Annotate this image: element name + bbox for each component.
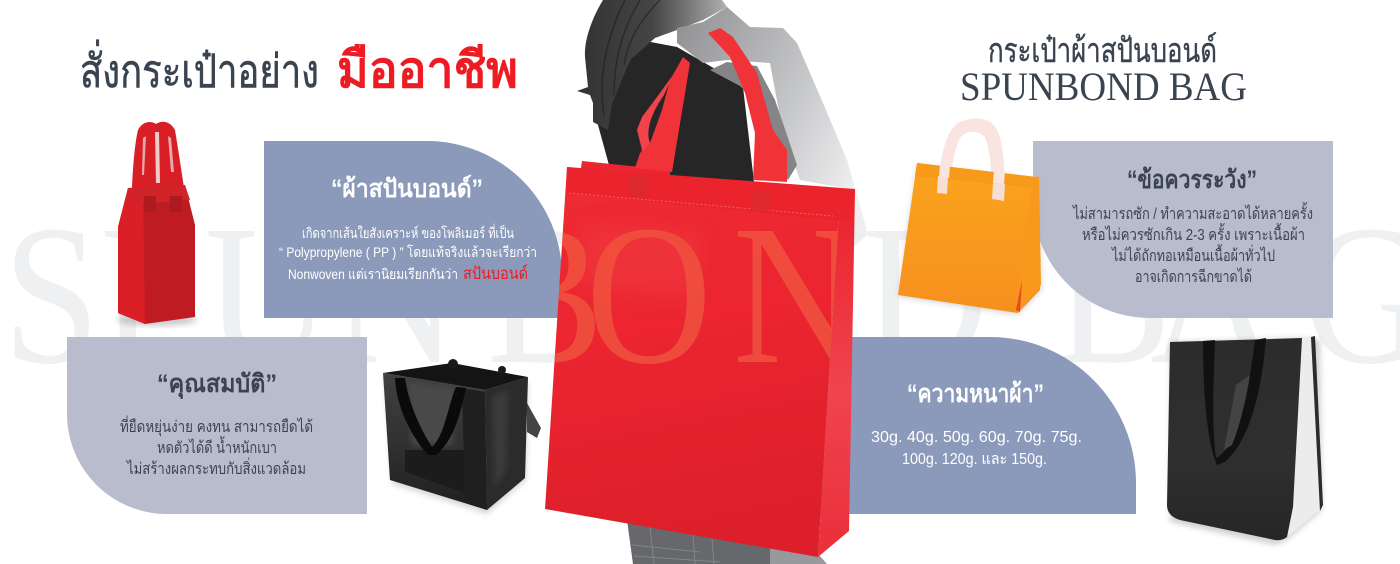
highlight xyxy=(580,225,700,300)
panel: fabric definition xyxy=(264,141,562,318)
heading: fabric: “ผ้าสปันบอนด์” xyxy=(331,174,483,203)
watermark over bag: SPUNBONDBAG xyxy=(3,184,1400,406)
icon: black box bag xyxy=(383,359,541,514)
title: right: SPUNBOND BAG xyxy=(960,64,1247,109)
gusset panel xyxy=(818,189,855,557)
text: properties description: ไม่สร้างผลกระทบกับสิ่งแวดล้อม xyxy=(125,457,306,478)
photo: woman holding bag xyxy=(577,0,868,564)
top hem xyxy=(566,167,855,222)
shirt xyxy=(710,62,797,180)
handle tabs xyxy=(630,176,648,198)
hair strands xyxy=(602,0,660,115)
text: cautions description: อาจเกิดการฉีกขาดได้ xyxy=(1135,267,1252,286)
title: right: กระเป๋าผ้าสปันบอนด์ xyxy=(988,32,1217,70)
text: properties description xyxy=(120,415,313,478)
arm and hand xyxy=(677,7,868,248)
text: cautions description: หรือไม่ควรซักเกิน 2-3 ครั้ง เพราะเนื้อผ้า xyxy=(1082,223,1305,244)
text: properties description: ที่ยืดหยุ่นง่าย คงทน สามารถยืดได้ xyxy=(120,415,313,437)
panel: properties xyxy=(67,337,367,514)
title: left: มืออาชีพ xyxy=(337,42,518,98)
text: cautions description: ไม่สามารถซัก / ทำความสะอาดได้หลายครั้ง xyxy=(1071,202,1313,223)
hair xyxy=(577,0,727,130)
heading: properties: “คุณสมบัติ” xyxy=(157,370,277,400)
black top xyxy=(598,40,754,182)
icon: black and white tote xyxy=(1167,336,1323,545)
text: fabric description: เกิดจากเส้นใยสังเคราะห์ ของโพลิเมอร์ ที่เป็น xyxy=(302,224,514,241)
title: left: สั่งกระเป๋าอย่าง xyxy=(80,39,319,97)
trousers right xyxy=(770,545,827,564)
stitching xyxy=(569,193,833,216)
heading: thickness: “ความหนาผ้า” xyxy=(907,380,1044,408)
text: thickness values xyxy=(871,429,1082,468)
front panel xyxy=(545,167,840,557)
text: fabric description: สปันบอนด์ xyxy=(463,264,528,283)
panel: fabric thickness xyxy=(820,337,1136,514)
back strap xyxy=(636,75,673,166)
heading: cautions: “ข้อควรระวัง” xyxy=(1127,166,1257,194)
text: fabric description xyxy=(279,224,537,283)
watermark: SPUNBOND BAG: SPUNBONDBAG xyxy=(3,184,1400,406)
text: thickness values: 100g. 120g. และ 150g. xyxy=(902,451,1047,468)
title: left xyxy=(80,39,518,98)
text: properties description: หดตัวได้ดี น้ำหนักเบา xyxy=(157,436,277,457)
text: fabric description: Nonwoven แต่เรานิยมเรียกกันว่า xyxy=(288,266,458,282)
plaid xyxy=(632,526,720,564)
panel: cautions xyxy=(1033,141,1333,318)
back flap xyxy=(580,161,670,180)
icon: small red bag xyxy=(117,122,197,326)
text: cautions description xyxy=(1071,202,1313,286)
text: thickness values: 30g. 40g. 50g. 60g. 70g. 75g. xyxy=(871,429,1082,446)
text: cautions description: ไม่ได้ถักทอเหมือนเนื้อผ้าทั่วไป xyxy=(1110,244,1275,265)
icon: main red bag xyxy=(545,28,855,557)
title: right xyxy=(960,32,1247,109)
trousers xyxy=(627,520,827,564)
handles xyxy=(708,28,787,182)
text: fabric description: “ Polypropylene ( PP ) ” โดยแท้จริงแล้วจะเรียกว่า xyxy=(279,244,537,260)
icon: orange bag xyxy=(898,119,1042,315)
